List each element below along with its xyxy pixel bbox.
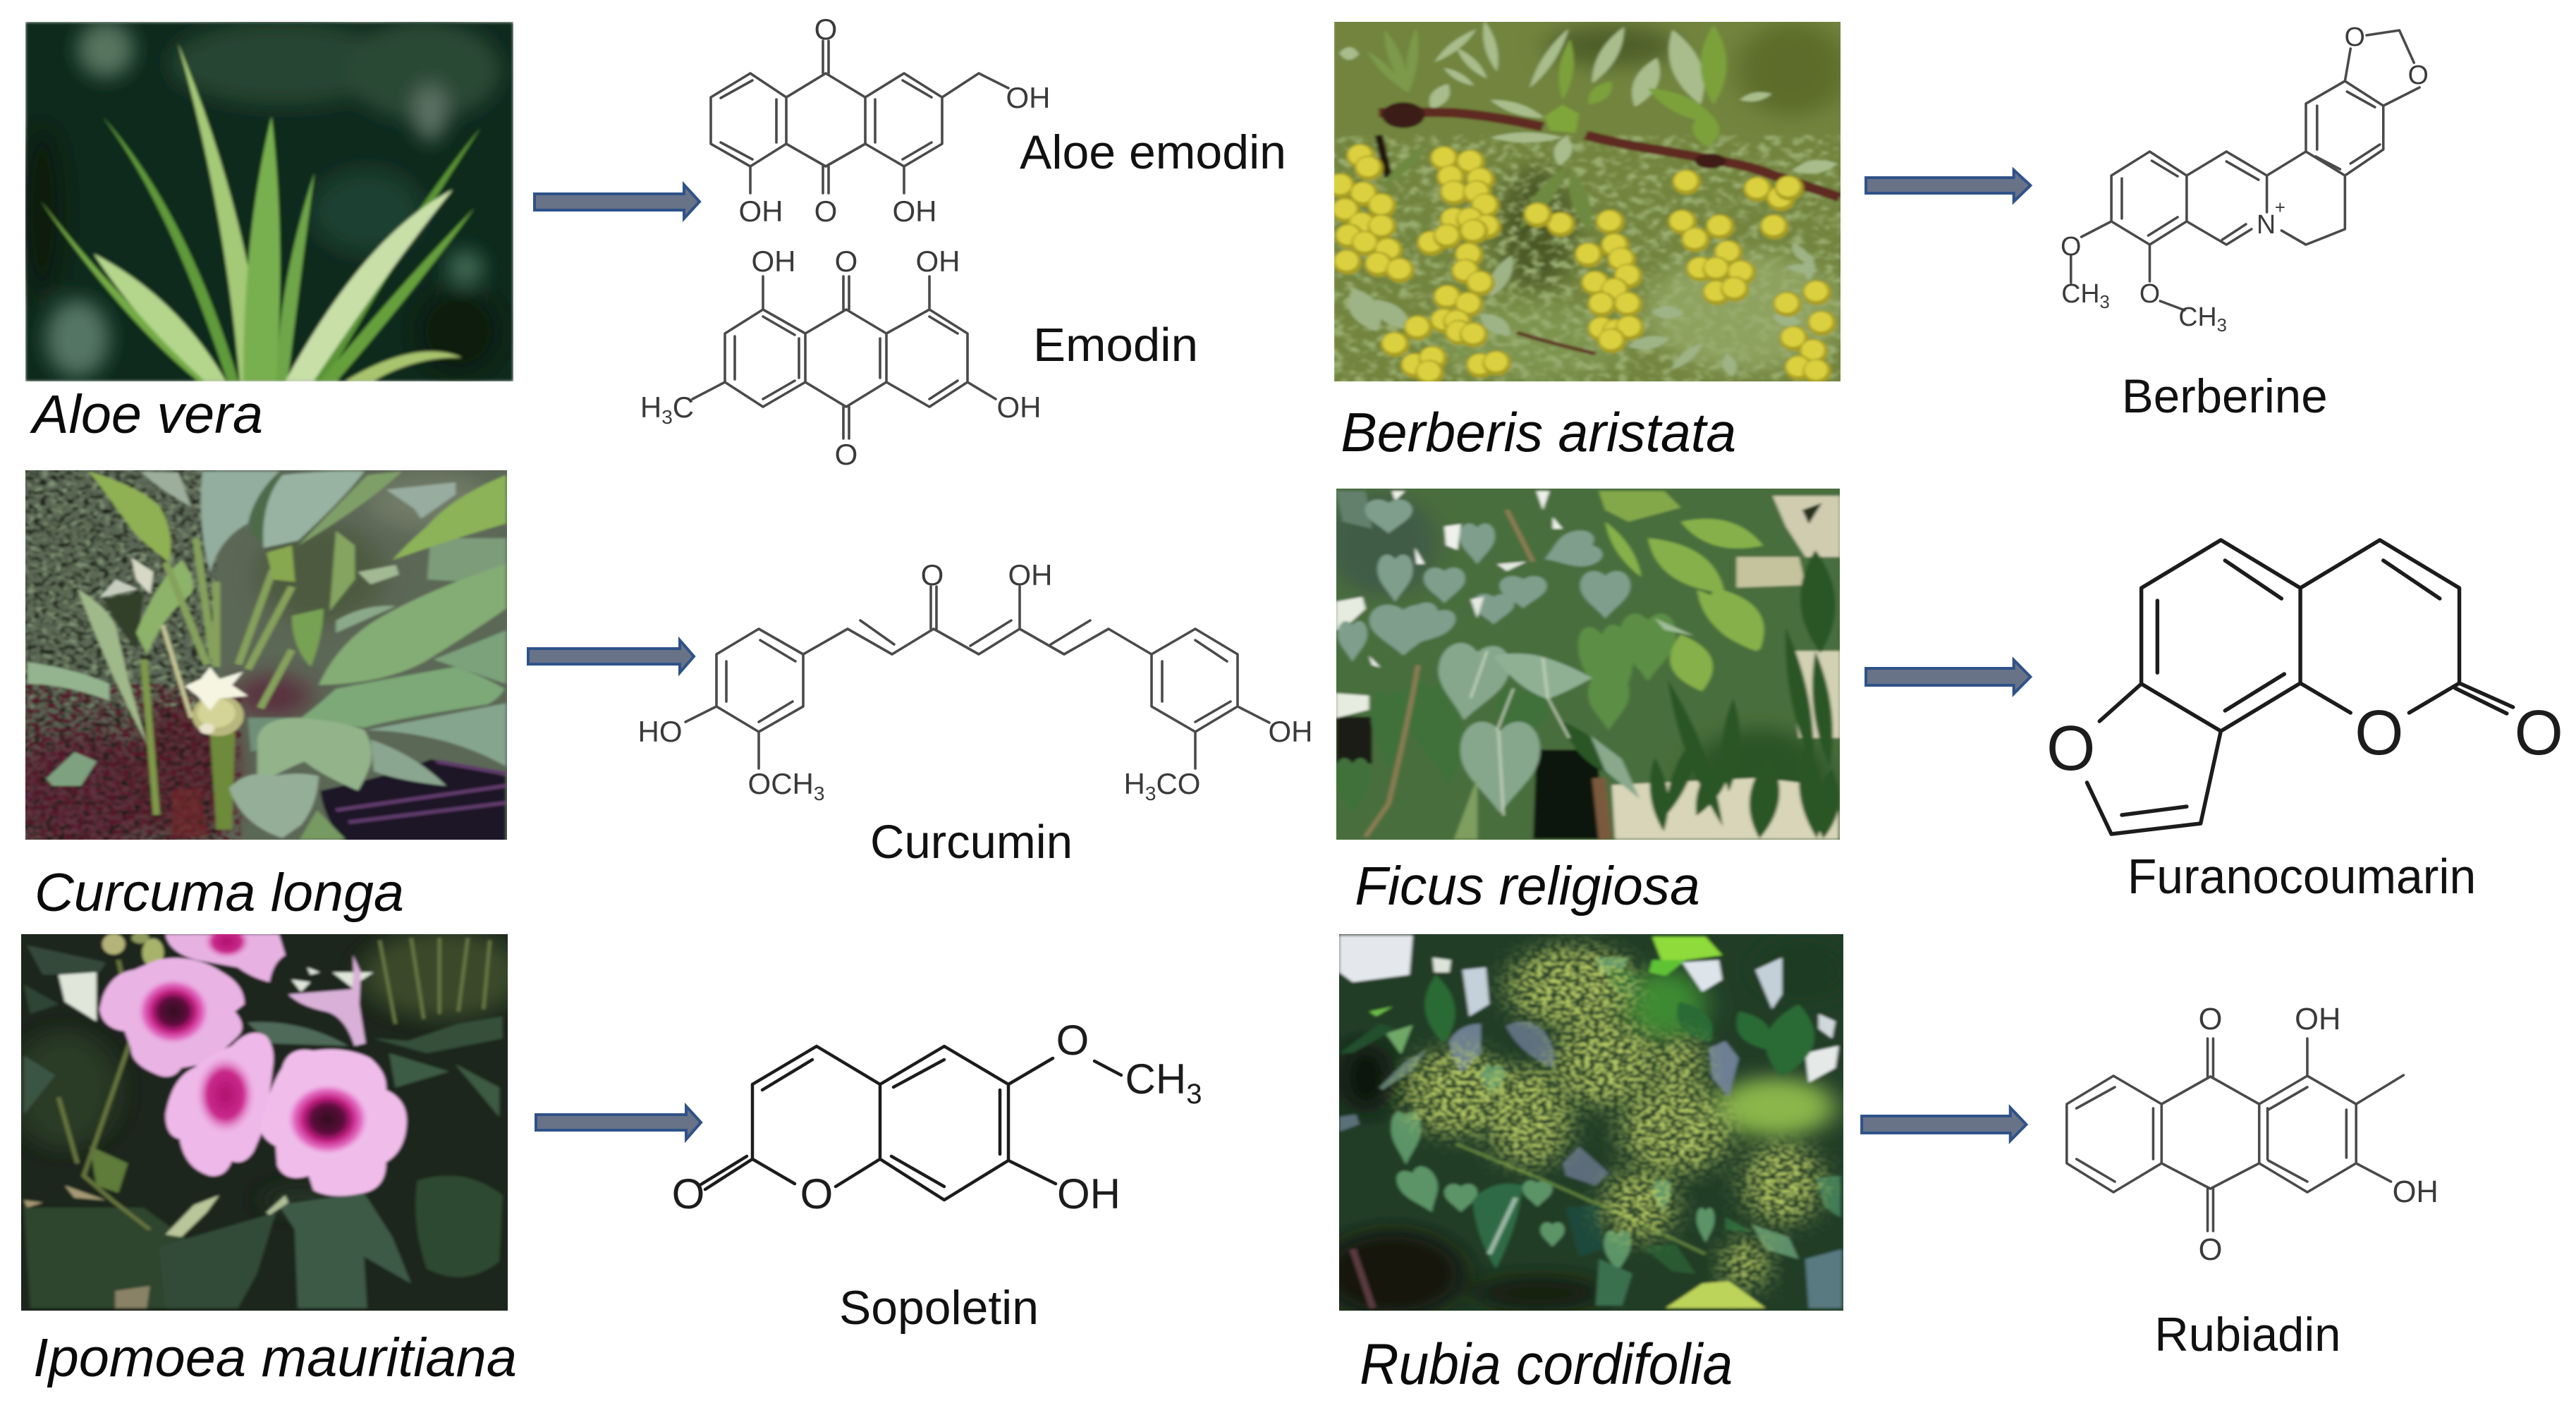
compound name: Sopoletin: Sopoletin — [839, 1281, 1039, 1335]
structure: Rubiadin: O — [2199, 1002, 2222, 1036]
structure: Curcumin: HO — [637, 715, 683, 748]
species name: Aloe vera: Aloe vera — [30, 384, 263, 445]
structure: Sopoletin: 3 — [1186, 1079, 1202, 1110]
photo: Aloe vera plant — [21, 21, 513, 381]
structure: Berberine: O — [2061, 232, 2081, 262]
structure: Aloe emodin — [711, 13, 1051, 228]
structure: Emodin: O — [835, 245, 857, 278]
structure: Rubiadin: OH — [2295, 1002, 2340, 1036]
structure: Furanocoumarin: O — [2046, 713, 2095, 783]
structure: Emodin: OH — [915, 245, 960, 278]
structure: Emodin: H — [640, 391, 661, 424]
structure: Furanocoumarin: O — [2355, 697, 2403, 768]
structure: Berberine: CH — [2061, 279, 2099, 309]
panel: Ficus religiosa — [1326, 486, 2563, 917]
structure: Curcumin: 3 — [814, 783, 824, 804]
species name: Ipomoea mauritiana: Ipomoea mauritiana — [33, 1328, 517, 1388]
structure: Emodin: C — [673, 391, 694, 424]
compound name: Furanocoumarin: Furanocoumarin — [2128, 849, 2476, 904]
structure: Aloe emodin: OH — [893, 195, 936, 228]
structure: Aloe emodin: OH — [739, 195, 783, 228]
structure: Berberine: + — [2275, 198, 2285, 218]
photo: Ipomoea mauritiana flowers — [11, 924, 525, 1315]
arrow: Curcuma longa to Curcumin — [528, 640, 694, 673]
structure: Berberine: N — [2257, 210, 2276, 240]
compound name: Aloe emodin: Aloe emodin — [1020, 125, 1286, 179]
structure: Emodin — [640, 245, 1041, 471]
arrow: Rubia cordifolia to Rubiadin — [1862, 1108, 2026, 1141]
structure: Sopoletin: O — [672, 1170, 704, 1218]
arrow: Aloe vera to compounds — [535, 185, 700, 219]
structure: Berberine: 3 — [2099, 293, 2110, 312]
structure: Sopoletin: O — [1056, 1017, 1089, 1064]
structure: Emodin: OH — [997, 391, 1041, 424]
photo: Ficus religiosa tree — [1326, 486, 1848, 843]
structure: Furanocoumarin — [2046, 540, 2563, 834]
structure: Sopoletin — [672, 1017, 1202, 1218]
structure: Aloe emodin: OH — [1006, 81, 1051, 114]
structure: Rubiadin: O — [2199, 1232, 2222, 1267]
structure: Sopoletin: CH — [1125, 1055, 1186, 1103]
structure: Rubiadin — [2067, 1002, 2438, 1267]
structure: Berberine — [2061, 23, 2429, 336]
panel: Aloe vera — [21, 13, 1286, 471]
panel: Ipomoea mauritiana — [11, 924, 1202, 1388]
compound name: Rubiadin: Rubiadin — [2154, 1309, 2340, 1361]
structure: Curcumin: 3 — [1145, 783, 1156, 804]
structure: Berberine: CH — [2178, 302, 2217, 332]
arrow: Ficus religiosa to Furanocoumarin — [1866, 660, 2030, 694]
structure: Rubiadin: OH — [2393, 1175, 2438, 1209]
structure: Curcumin: OH — [1268, 715, 1313, 748]
structure: Curcumin: CO — [1156, 767, 1200, 800]
structure: Emodin: OH — [752, 245, 795, 278]
arrow: Berberis aristata to Berberine — [1866, 170, 2030, 202]
structure: Emodin: O — [835, 438, 857, 471]
structure: Berberine: O — [2139, 279, 2160, 309]
photo: Berberis aristata plant — [1326, 18, 1848, 385]
structure: Aloe emodin: O — [814, 195, 837, 228]
structure: Curcumin: OH — [1008, 558, 1052, 592]
structure: Aloe emodin: O — [814, 13, 837, 46]
species name: Ficus religiosa: Ficus religiosa — [1355, 857, 1700, 917]
panel: Curcuma longa — [2, 465, 1313, 923]
structure: Sopoletin: OH — [1057, 1170, 1121, 1218]
photo: Rubia cordifolia plant — [1319, 931, 1855, 1318]
structure: Sopoletin: O — [800, 1170, 833, 1218]
structure: Curcumin: O — [921, 558, 944, 592]
arrow: Ipomoea mauritiana to Sopoletin — [536, 1106, 701, 1139]
photo: Curcuma longa plant — [25, 470, 507, 840]
structure: Berberine: 3 — [2217, 316, 2227, 336]
structure: Curcumin: OCH — [748, 767, 814, 800]
panel: Rubia cordifolia — [1319, 931, 2438, 1397]
species name: Rubia cordifolia: Rubia cordifolia — [1360, 1332, 1733, 1397]
structure: Curcumin: H — [1124, 767, 1145, 800]
structure: Berberine: O — [2345, 23, 2365, 52]
structure: Furanocoumarin: O — [2515, 697, 2563, 768]
compound name: Curcumin: Curcumin — [870, 816, 1073, 869]
panel: Berberis aristata — [1326, 18, 2429, 463]
structure: Berberine: O — [2408, 61, 2429, 90]
species name: Berberis aristata: Berberis aristata — [1341, 403, 1736, 463]
structure: Curcumin — [637, 558, 1313, 804]
structure: Emodin: 3 — [661, 406, 673, 428]
species name: Curcuma longa: Curcuma longa — [35, 863, 404, 923]
compound name: Emodin: Emodin — [1033, 319, 1198, 372]
compound name: Berberine: Berberine — [2122, 370, 2328, 423]
